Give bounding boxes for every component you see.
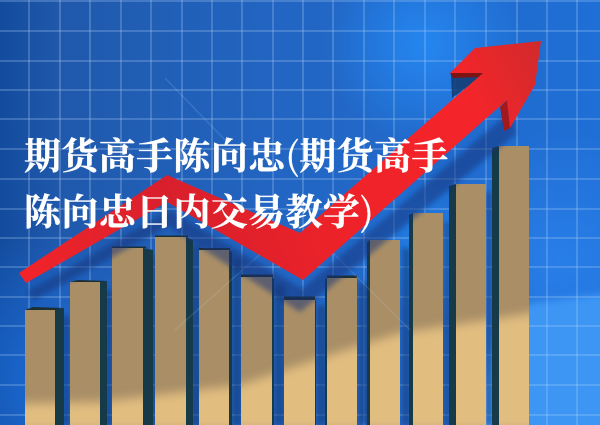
title — [24, 126, 449, 236]
diagonal light streaks — [165, 78, 410, 330]
title line 1: 期货高手陈向忠(期货高手 — [24, 126, 449, 180]
bar chart — [25, 146, 529, 425]
bar side faces — [55, 146, 499, 425]
title line 2: 陈向忠日内交易教学) — [24, 182, 374, 236]
arrowhead shadow — [451, 74, 483, 98]
bar cast shadows — [62, 192, 492, 425]
red trend arrow — [19, 41, 541, 312]
arrow shadow — [27, 110, 516, 312]
bar front faces — [25, 146, 529, 425]
arrow side faces — [450, 73, 483, 78]
bar top edges — [25, 236, 357, 310]
